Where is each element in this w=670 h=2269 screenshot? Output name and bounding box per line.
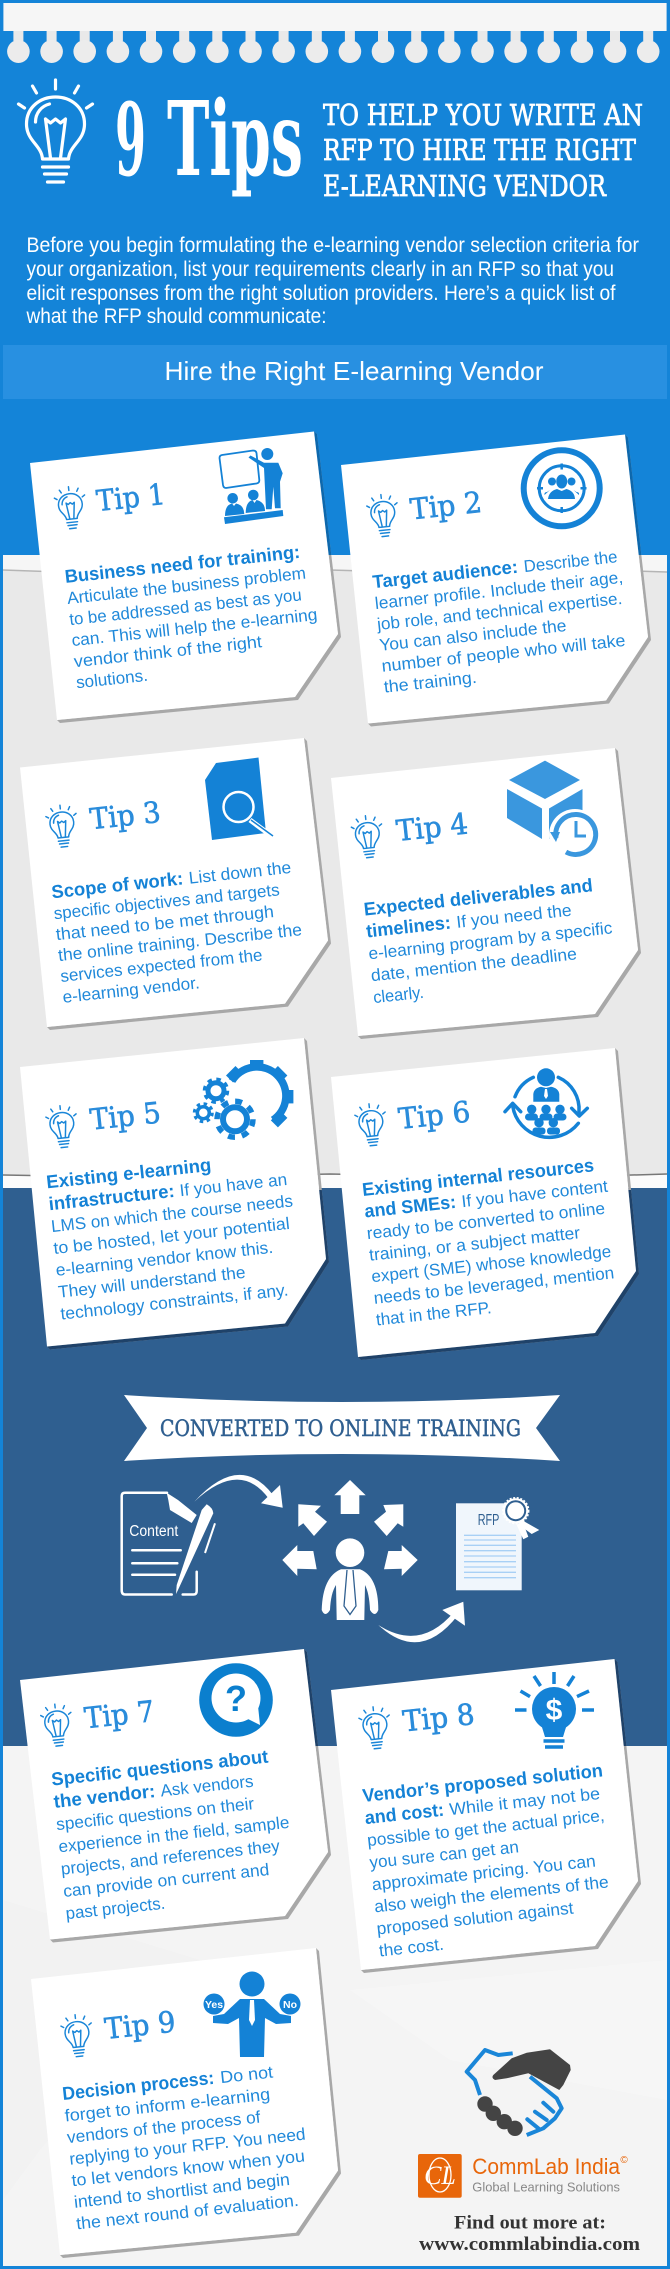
icon: question speech bubble: ?	[225, 1678, 247, 1719]
tip 5 content: They will understand the	[57, 1263, 246, 1302]
icon: person weighing yes and no	[204, 1972, 300, 2057]
icon: dollar light bulb: $	[546, 1694, 563, 1727]
tip 6 content: that in the RFP.	[375, 1298, 492, 1329]
tip 4 content: Tip 4	[395, 807, 470, 848]
heading banner: Hire the Right E-learning Vendor	[3, 345, 667, 399]
tip 5 content: Existing e-learning	[45, 1154, 212, 1192]
panel: tip 8	[331, 1659, 638, 1970]
icon: document with magnifier	[205, 758, 273, 840]
tip 2 content: number of people who will take	[381, 631, 626, 676]
tip 9 content: the next round of evaluation.	[75, 2191, 300, 2233]
logo: CommLab India: ©	[620, 2155, 628, 2166]
tip 2 content: the training.	[383, 668, 478, 697]
panel: tip 6	[331, 1048, 636, 1357]
panel: tip 9	[31, 1948, 338, 2255]
tip 6 content: training, or a subject matter	[368, 1223, 581, 1265]
tip 7 content: Ask vendors	[160, 1772, 254, 1800]
tip 9 content	[54, 1992, 313, 2233]
tip 8 content	[353, 1683, 620, 1961]
title: subtitle lines	[323, 98, 643, 203]
intro text block: your organization, list your requirements clearly in an RFP so that you	[26, 258, 614, 281]
tip 8 content: approximate pricing. You can	[371, 1851, 597, 1894]
tip 8 content: and cost:	[364, 1799, 445, 1828]
tip 1 content: Business need for training:	[64, 541, 301, 587]
tip 3 content: Scope of work:	[50, 867, 184, 902]
tip 7 content	[40, 1681, 297, 1924]
tip 4 content: If you need the	[455, 901, 573, 932]
panel: tip 7	[20, 1649, 328, 1940]
tip 5 content: technology constraints, if any.	[59, 1280, 289, 1324]
tip 5 content: e-learning vendor know this.	[55, 1238, 274, 1280]
tip 6 content: Tip 6	[397, 1095, 472, 1136]
diagram: content document with pen	[122, 1493, 215, 1594]
tip 1 content: to be addressed as best as you	[68, 585, 303, 629]
tip 7 content: experience in the field, sample	[58, 1813, 290, 1856]
tip 9 content: to let vendors know when you	[71, 2146, 306, 2190]
background: crumpled paper section	[3, 1746, 667, 2266]
icon: SME with team	[505, 1068, 587, 1137]
tip 1 content: Tip 1	[95, 477, 167, 518]
icon: person weighing yes and no: No	[283, 1999, 297, 2011]
tip 8 content: also weigh the elements of the	[373, 1872, 610, 1916]
tip 6 content: If you have content	[461, 1177, 609, 1211]
tip 4 content: date, mention the deadline	[370, 944, 578, 985]
tip 1 content: vendor think of the right	[73, 632, 263, 671]
tip 9 content: forget to inform e-learning	[64, 2085, 271, 2126]
arrow: content to person	[194, 1475, 283, 1508]
title: 9 Tips: 9	[115, 81, 146, 199]
title: 9 Tips	[115, 79, 303, 200]
tip 3 content: services expected from the	[59, 945, 263, 986]
intro text block: what the RFP should communicate:	[26, 305, 326, 328]
title: 9 Tips: Tips	[167, 79, 303, 200]
intro text block	[26, 234, 639, 328]
tip 6 content: ready to be converted to online	[366, 1199, 606, 1243]
tip 9 content: vendors of the process of	[66, 2108, 262, 2147]
tip 7 content: Tip 7	[83, 1694, 156, 1735]
icon: gears	[194, 1060, 293, 1137]
tip 3 content	[42, 781, 307, 1007]
tip 2 content: You can also include the	[378, 616, 567, 655]
tip 9 content: replying to your RFP. You need	[68, 2125, 306, 2169]
ribbon: converted to online training	[124, 1395, 560, 1461]
tip 7 content: specific questions on their	[55, 1794, 255, 1834]
heading banner: Hire the Right E-learning Vendor: Hire the Right E-learning Vendor	[164, 356, 544, 386]
tip 1 content	[53, 462, 323, 692]
intro text block: Before you begin formulating the e-learning vendor selection criteria for	[26, 234, 639, 257]
tip 2 content: Target audience:	[371, 556, 519, 592]
logo: CommLab India: Global Learning Solutions	[472, 2180, 620, 2195]
text: find out more: www.commlabindia.com	[419, 2234, 640, 2255]
tip 8 content: Vendor’s proposed solution	[361, 1759, 604, 1806]
tip 3 content: List down the	[188, 858, 292, 888]
tip 7 content: past projects.	[65, 1894, 166, 1923]
tip 6 content: and SMEs:	[363, 1191, 457, 1222]
tip 6 content: expert (SME) whose knowledge	[370, 1242, 612, 1286]
tip 5 content: If you have an	[179, 1170, 288, 1200]
tip 3 content: e-learning vendor.	[62, 973, 200, 1007]
logo: CommLab India: CommLab India	[472, 2154, 621, 2179]
icon: box with clock	[507, 761, 601, 861]
tip 5 content: LMS on which the course needs	[50, 1191, 294, 1236]
title: subtitle lines: E-LEARNING VENDOR	[323, 169, 607, 203]
tip 3 content: that need to be met through	[55, 902, 275, 944]
tip 5 content	[38, 1082, 303, 1324]
tip 9 content: Tip 9	[103, 2005, 177, 2046]
tip 7 content: the vendor:	[53, 1780, 156, 1812]
diagram: RFP document with badge: RFP	[478, 1512, 499, 1529]
tip 8 content: possible to get the actual price,	[366, 1806, 605, 1850]
tip 3 content: specific objectives and targets	[53, 880, 280, 923]
panel: tip 3	[20, 738, 328, 1027]
tip 3 content: the online training. Describe the	[57, 920, 303, 965]
tip 9 content: intend to shortlist and begin	[73, 2170, 291, 2212]
icon: question speech bubble	[199, 1663, 273, 1737]
tip 5 content: infrastructure:	[48, 1180, 176, 1214]
tip 6 content: Existing internal resources	[361, 1154, 595, 1200]
tip 1 content: solutions.	[75, 666, 149, 692]
icon: dollar light bulb	[515, 1672, 594, 1747]
tip 9 content: Decision process:	[61, 2067, 215, 2104]
tip 2 content: learner profile. Include their age,	[374, 568, 624, 613]
panel: tip 5	[20, 1038, 326, 1346]
icon: handshake	[467, 2049, 571, 2136]
tip 4 content: Expected deliverables and	[363, 874, 594, 920]
diagram: content document with pen: Content	[129, 1523, 179, 1540]
tip 4 content: e-learning program by a specific	[368, 918, 614, 963]
background: grey section	[3, 555, 667, 1191]
tip 5 content: Tip 5	[88, 1095, 162, 1137]
panel: tip 1	[30, 432, 338, 720]
text: find out more	[419, 2212, 640, 2255]
tip 7 content: projects, and references they	[60, 1836, 281, 1879]
icon: header light bulb	[18, 80, 92, 182]
tip 4 content: timelines:	[365, 912, 452, 941]
tip 6 content	[353, 1080, 621, 1329]
text: find out more: Find out more at:	[454, 2212, 606, 2233]
tip 4 content: clearly.	[372, 983, 425, 1007]
tip 6 content: needs to be leveraged, mention	[373, 1263, 615, 1308]
paper strip with tabs	[3, 3, 667, 63]
tip 8 content: proposed solution against	[376, 1899, 575, 1938]
ribbon: converted to online training: CONVERTED TO ONLINE TRAINING	[160, 1417, 521, 1442]
tip 1 content: can. This will help the e-learning	[71, 605, 318, 650]
tip 2 content	[362, 470, 633, 697]
tip 7 content: Specific questions about	[50, 1746, 269, 1790]
tip 9 content: Do not	[219, 2063, 274, 2087]
tip 8 content: you sure can get an	[369, 1837, 520, 1872]
diagram: RFP document with badge	[456, 1498, 539, 1590]
intro text block: elicit responses from the right solution providers. Here’s a quick list of	[26, 282, 616, 305]
tip 7 content: can provide on current and	[62, 1860, 270, 1901]
tip 4 content	[350, 791, 618, 1007]
tip 8 content: Tip 8	[401, 1697, 476, 1738]
card shadows	[47, 432, 651, 2258]
tip 5 content: to be hosted, let your potential	[52, 1214, 291, 1258]
tip 2 content: Describe the	[523, 547, 618, 576]
tip 8 content: While it may not be	[448, 1784, 601, 1819]
panel: tip 4	[331, 748, 638, 1036]
logo: CommLab India: CL	[424, 2161, 456, 2190]
panel: tip 2	[341, 434, 648, 724]
tip 1 content: Articulate the business problem	[66, 564, 307, 608]
background: dark blue section	[3, 1188, 667, 1746]
tip 3 content: Tip 3	[88, 795, 162, 836]
icon: presenter with audience	[220, 448, 283, 524]
icon: target audience	[524, 450, 600, 526]
tip 8 content: the cost.	[378, 1935, 445, 1961]
tip 2 content: Tip 2	[408, 485, 484, 527]
arrow: person to RFP	[378, 1602, 465, 1642]
tip 2 content: job role, and technical expertise.	[375, 589, 623, 634]
logo: CommLab India	[418, 2154, 628, 2198]
icon: person weighing yes and no: Yes	[205, 1999, 223, 2011]
diagram: person with radiating arrows	[282, 1480, 418, 1620]
